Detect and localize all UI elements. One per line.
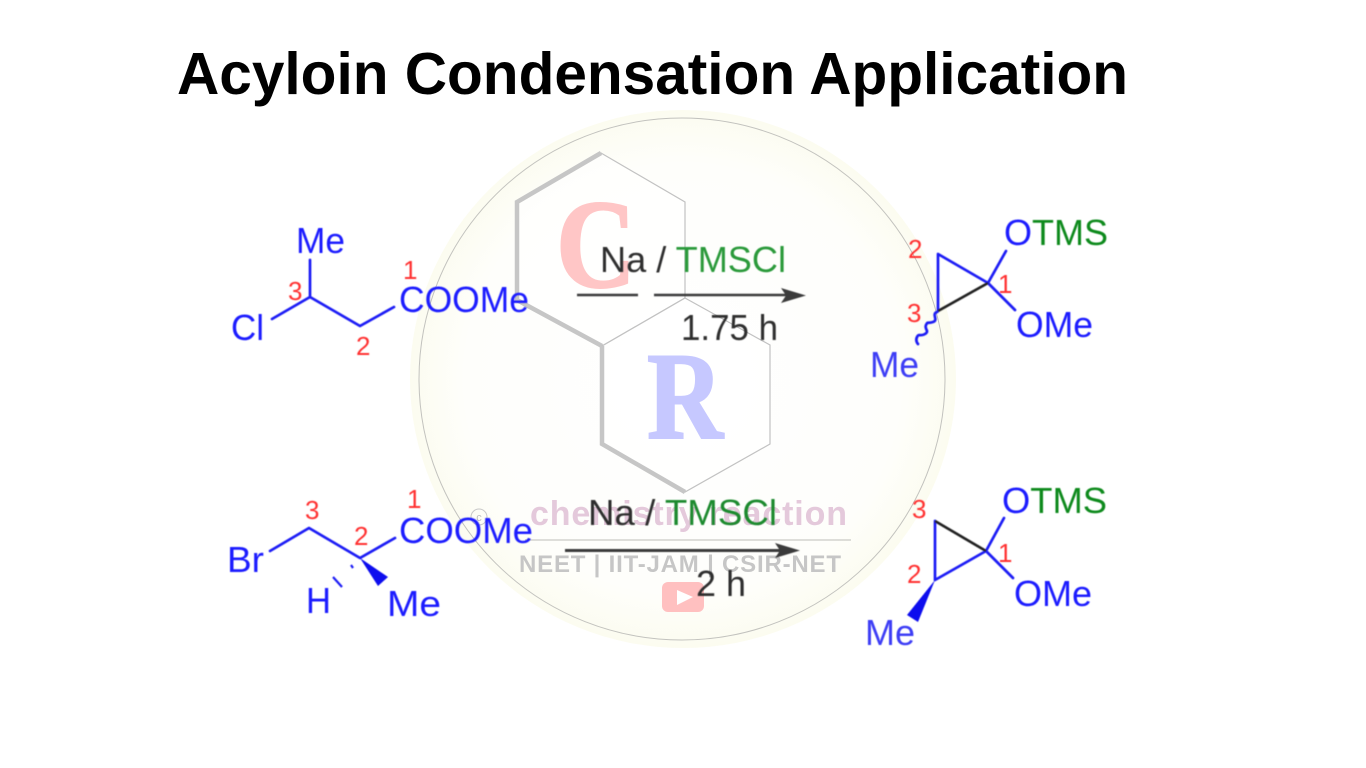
reaction arrow 2 with reagents: Na / TMSCl — [588, 492, 777, 533]
reaction arrow 2 with reagents — [565, 492, 800, 604]
product 1: cyclopropane — [870, 212, 1108, 385]
watermark hexagon lower — [602, 298, 770, 492]
product 1: cyclopropane: 2 — [908, 234, 922, 264]
product 2: cyclopropane: OTMS — [1002, 480, 1107, 521]
reactant 1: 3-chloro butanoate: COOMe — [399, 279, 529, 320]
reaction arrow 1 with reagents: Na / TMSCl — [600, 239, 786, 280]
reactant 2: 3-bromo propanoate: H — [306, 580, 331, 621]
reactant 2: 3-bromo propanoate: COOMe — [399, 510, 533, 551]
reactant 2: 3-bromo propanoate: Me — [387, 583, 441, 624]
reactant 1: 3-chloro butanoate: Cl — [231, 307, 264, 348]
product 2: cyclopropane: 2 — [907, 559, 921, 589]
watermark letter C: C — [556, 176, 636, 315]
product 1: cyclopropane: OTMS — [1004, 212, 1108, 253]
wedge bond — [907, 580, 935, 622]
watermark copyright symbol — [471, 509, 487, 525]
watermark hexagon upper — [517, 153, 685, 346]
product 1: cyclopropane: 1 — [998, 269, 1012, 299]
reactant 2: 3-bromo propanoate: Br — [227, 539, 264, 580]
watermark divider — [525, 539, 851, 541]
hashed bond — [333, 565, 353, 587]
watermark logo — [410, 110, 956, 648]
reactant 2: 3-bromo propanoate: 3 — [305, 495, 319, 525]
reaction arrow 2 with reagents: 2 h — [696, 563, 746, 604]
icon: video play badge — [662, 582, 704, 612]
product 2: cyclopropane: 1 — [998, 538, 1012, 568]
reactant 1: 3-chloro butanoate: 1 — [403, 255, 417, 285]
reaction arrow 1 with reagents: 1.75 h — [681, 307, 778, 348]
title: Acyloin Condensation Application — [177, 41, 1128, 107]
reactant 1: 3-chloro butanoate: Me — [296, 220, 345, 261]
product 1: cyclopropane: Me — [870, 344, 919, 385]
product 1: cyclopropane: OMe — [1016, 304, 1093, 345]
reactant 2: 3-bromo propanoate: 2 — [354, 521, 368, 551]
product 2: cyclopropane — [865, 480, 1107, 653]
wedge bond — [360, 558, 388, 586]
product 2: cyclopropane: OMe — [1014, 573, 1092, 614]
watermark circle — [410, 110, 956, 648]
reactant 1: 3-chloro butanoate: 2 — [356, 331, 370, 361]
product 1: cyclopropane: 3 — [907, 298, 921, 328]
watermark brand text: chemistry reaction — [530, 495, 847, 533]
reactant 1: 3-chloro butanoate — [231, 220, 529, 361]
product 2: cyclopropane: 3 — [912, 494, 926, 524]
reactant 1: 3-chloro butanoate: 3 — [288, 276, 302, 306]
product 2: cyclopropane: Me — [865, 612, 915, 653]
watermark letter R: R — [647, 328, 724, 465]
reactant 2: 3-bromo propanoate — [227, 484, 533, 624]
reaction arrow 1 with reagents — [577, 239, 806, 348]
watermark copyright symbol: c — [476, 512, 482, 524]
watermark tagline: NEET | IIT-JAM | CSIR-NET — [519, 551, 841, 578]
reactant 2: 3-bromo propanoate: 1 — [407, 484, 421, 514]
